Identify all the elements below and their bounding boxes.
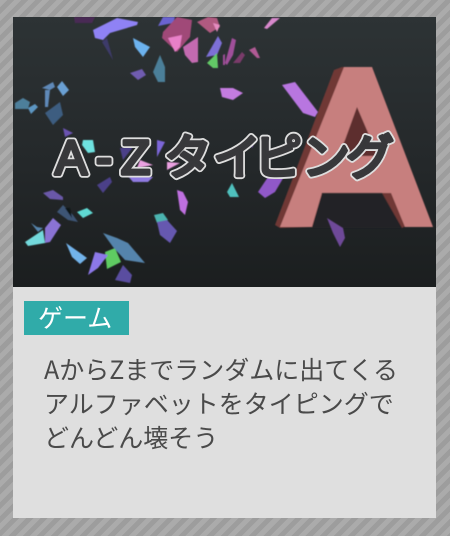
letter A (275, 67, 433, 228)
description text: どんどん壊そう (44, 419, 218, 455)
hero image: A-Z typing game artwork (13, 17, 436, 287)
category tag: ゲーム (38, 299, 112, 335)
game title: A-Zタイピング: A-Zタイピング (55, 132, 394, 185)
description text: アルファベットをタイピングで (44, 385, 394, 421)
category tag (24, 301, 129, 335)
description text: AからZまでランダムに出てくる (44, 351, 398, 387)
shards: blue, purple, pink and teal fragments (15, 17, 345, 283)
game title: A-Zタイピング: A-Zタイピング (55, 132, 394, 185)
description text (44, 351, 398, 455)
